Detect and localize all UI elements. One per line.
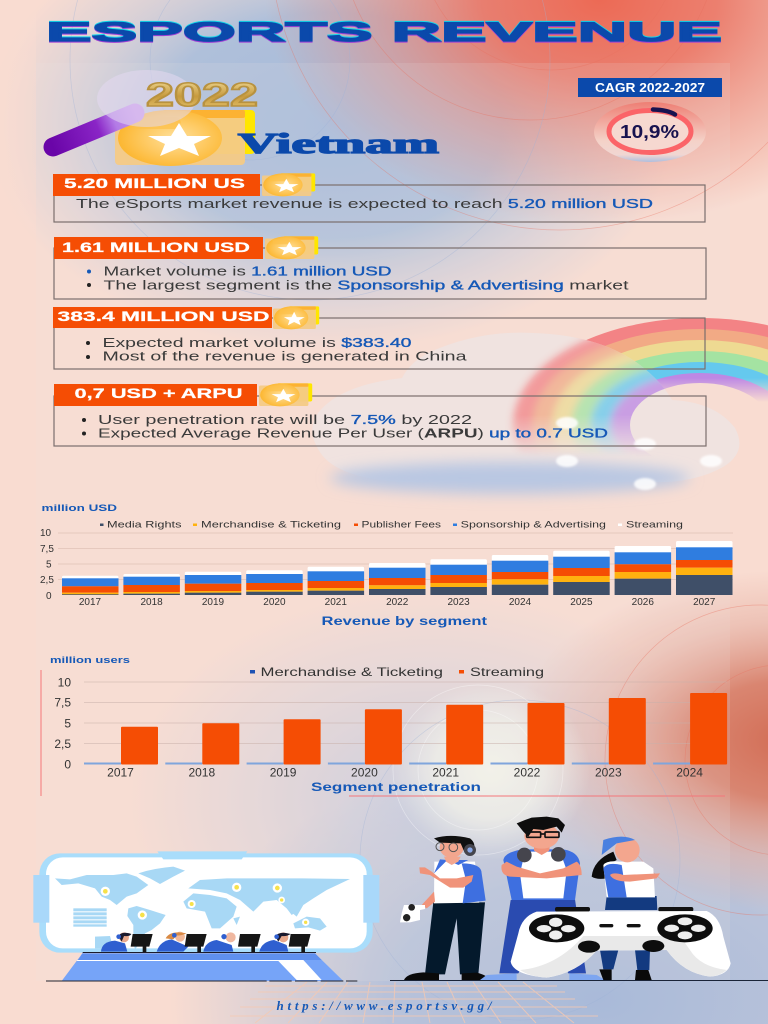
player right (592, 837, 660, 980)
panel: market volume card: Market volume is 1.61 million USD (104, 264, 392, 278)
panel: market volume card: The largest segment is the Sponsorship & Advertising market (104, 278, 629, 292)
chart legend: revenue by segment: Media Rights (107, 520, 182, 530)
chart: segment penetration bars: 2024 (676, 766, 703, 780)
chart: revenue by segment stacked bars: 2021 (325, 597, 347, 608)
chart: revenue by segment stacked bars: 2022 (386, 597, 409, 608)
chart legend: revenue by segment: Streaming (626, 520, 683, 530)
chart legend: revenue by segment: Merchandise & Ticketing (201, 520, 341, 530)
chart: revenue by segment stacked bars: 10 (40, 528, 52, 539)
bar 2025 (553, 551, 610, 595)
panel: revenue card: The eSports market revenue is expected to reach 5.20 million USD (76, 197, 653, 211)
chart legend: revenue by segment: Publisher Fees (362, 520, 441, 530)
chart: revenue by segment stacked bars: 0 (46, 591, 52, 602)
bar 2023 (430, 559, 487, 595)
bar 2027 (676, 541, 732, 595)
rainbow (586, 318, 768, 400)
chart: revenue by segment stacked bars: 7,5 (40, 544, 54, 555)
chart legend: segment penetration (250, 665, 544, 679)
player left (400, 836, 490, 980)
chart: segment penetration bars: 0 (64, 758, 71, 772)
chart: revenue by segment stacked bars: 2020 (263, 597, 286, 608)
bar 2021 (308, 567, 364, 595)
illustration: world map screen with players (33, 851, 379, 981)
chart: revenue by segment stacked bars: 2,5 (40, 575, 54, 586)
panel: ARPU card: User penetration rate will be 7.5% by 2022 (98, 413, 472, 427)
CAGR label: CAGR 2022-2027 (595, 81, 705, 95)
chart: revenue by segment stacked bars: 2019 (202, 597, 225, 608)
panel: market volume card: 1.61 MILLION USD (62, 239, 250, 255)
floor grid (230, 982, 598, 1023)
chart: segment penetration bars: 2021 (432, 766, 459, 780)
chart: segment penetration bars: 2023 (595, 766, 622, 780)
donut: CAGR value: 10,9% (620, 122, 679, 142)
chart: revenue by segment stacked bars: 5 (46, 560, 52, 570)
panel: ARPU card: Expected Average Revenue Per User ( ARPU ) up to 0.7 USD (98, 426, 608, 440)
panel: ARPU card (54, 383, 706, 446)
chart: revenue by segment stacked bars: 2023 (447, 597, 470, 608)
bar 2019 (185, 572, 241, 595)
players at desks (101, 932, 291, 952)
illustration: esports players and game controller (390, 817, 768, 981)
title: ESPORTS REVENUE (46, 17, 722, 47)
chart: revenue by segment stacked bars: 2024 (509, 597, 532, 608)
chart: revenue by segment stacked bars: 2026 (632, 597, 654, 608)
panel: revenue card: 5.20 MILLION US (64, 175, 245, 191)
panel: revenue card (53, 173, 705, 222)
player centre (480, 817, 605, 980)
chart: revenue by segment stacked bars: 2018 (140, 597, 163, 608)
bar 2024 (492, 555, 548, 595)
icon: magnifier with folder star (53, 70, 255, 166)
chart: segment penetration bars (41, 670, 727, 796)
bar 2026 (615, 546, 671, 595)
bar 2017 (62, 576, 118, 595)
chart: segment penetration bars: 5 (64, 716, 71, 730)
monitors (131, 934, 311, 952)
bar 2022 (369, 563, 426, 595)
panel: ARPU card: 0,7 USD + ARPU (74, 385, 242, 401)
chart legend: revenue by segment: Sponsorship & Advertising (461, 520, 606, 530)
bar 2020 (246, 570, 303, 595)
chart legend: revenue by segment (100, 520, 683, 530)
website URL: https://www.esportsv.gg/ (276, 998, 493, 1013)
year 2022: 2022 (146, 76, 258, 113)
desk (62, 953, 343, 981)
chart legend: segment penetration: Merchandise & Ticketing (260, 665, 443, 679)
chart: segment penetration bars: 2017 (107, 766, 134, 780)
chart: revenue by segment stacked bars: 2017 (79, 597, 102, 608)
chart: segment penetration bars: 2018 (188, 766, 215, 780)
chart: segment penetration bars: 2019 (270, 766, 297, 780)
panel: market volume card (54, 236, 706, 299)
chart: segment penetration bars: 2,5 (54, 737, 71, 751)
country name: Vietnam (238, 129, 439, 160)
chart unit: million USD: million USD (42, 503, 117, 514)
chart unit: million users: million users (50, 655, 130, 666)
donut: CAGR value (594, 102, 706, 162)
panel: expected volume card (53, 306, 705, 369)
chart caption: segment penetration: Segment penetration (311, 780, 481, 794)
cloud (312, 332, 740, 502)
chart: segment penetration bars: 7,5 (54, 696, 71, 710)
chart: segment penetration bars: 10 (58, 676, 71, 690)
chart: revenue by segment stacked bars (40, 528, 733, 608)
CAGR label (578, 78, 722, 97)
panel: expected volume card: 383.4 MILLION USD (58, 308, 270, 324)
panel: expected volume card: Most of the revenue is generated in China (102, 350, 467, 364)
bar 2018 (123, 574, 180, 595)
chart legend: segment penetration: Streaming (470, 665, 544, 679)
chart: segment penetration bars: 2022 (514, 766, 541, 780)
panel: expected volume card: Expected market volume is $383.40 (102, 336, 412, 350)
axis line accent (41, 670, 725, 796)
chart: segment penetration bars: 2020 (351, 766, 378, 780)
icon: game controller (511, 907, 731, 978)
chart: revenue by segment stacked bars: 2027 (693, 597, 716, 608)
icon: world map (55, 867, 350, 950)
chart caption: revenue by segment: Revenue by segment (322, 614, 487, 628)
chart: revenue by segment stacked bars: 2025 (570, 597, 593, 608)
